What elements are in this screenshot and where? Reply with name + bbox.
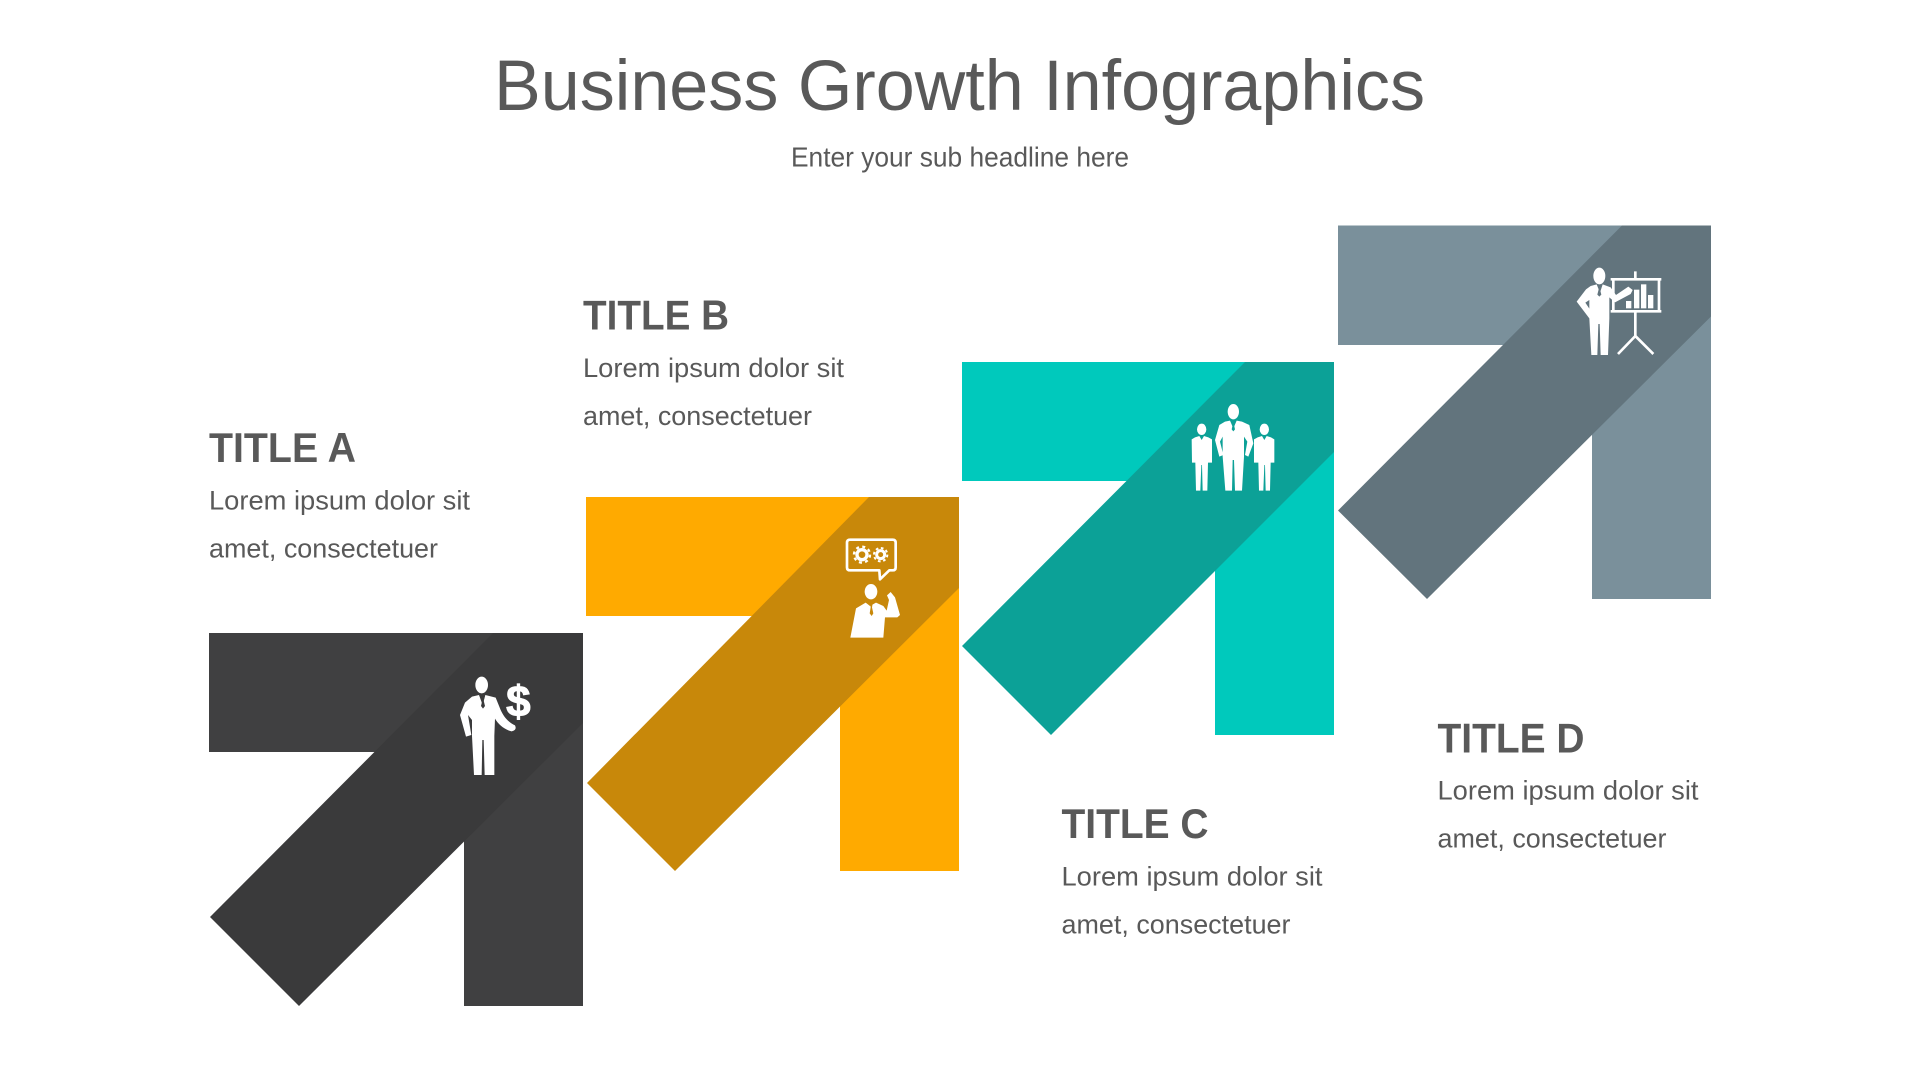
icon: businessman with dollar bbox=[460, 677, 531, 775]
heading A: TITLE A bbox=[209, 424, 356, 471]
body A: Lorem ipsum dolor sit bbox=[209, 486, 470, 516]
icon: three business people bbox=[1192, 404, 1274, 491]
text block B bbox=[583, 292, 844, 431]
body B: amet, consectetuer bbox=[583, 401, 812, 431]
body D: Lorem ipsum dolor sit bbox=[1438, 776, 1699, 806]
arrow D bbox=[1338, 226, 1711, 599]
arrow C bbox=[962, 362, 1334, 735]
heading C: TITLE C bbox=[1062, 800, 1208, 847]
body B: Lorem ipsum dolor sit bbox=[583, 353, 844, 383]
heading B: TITLE B bbox=[583, 292, 729, 338]
heading D: TITLE D bbox=[1438, 714, 1584, 762]
icon: businessman with dollar: $ bbox=[506, 678, 531, 727]
body C: Lorem ipsum dolor sit bbox=[1062, 862, 1323, 892]
text block D bbox=[1438, 714, 1699, 854]
text block C bbox=[1062, 800, 1323, 940]
body A: amet, consectetuer bbox=[209, 534, 438, 564]
title: Business Growth Infographics bbox=[494, 47, 1425, 126]
body D: amet, consectetuer bbox=[1438, 824, 1667, 854]
text block A bbox=[209, 424, 470, 564]
icon: businessman with gears speech bubble bbox=[847, 540, 900, 638]
arrow B bbox=[586, 497, 959, 871]
body C: amet, consectetuer bbox=[1062, 910, 1291, 940]
subtitle: Enter your sub headline here bbox=[791, 142, 1129, 172]
arrow A bbox=[209, 633, 583, 1006]
icon: presenter with chart board bbox=[1577, 268, 1661, 355]
